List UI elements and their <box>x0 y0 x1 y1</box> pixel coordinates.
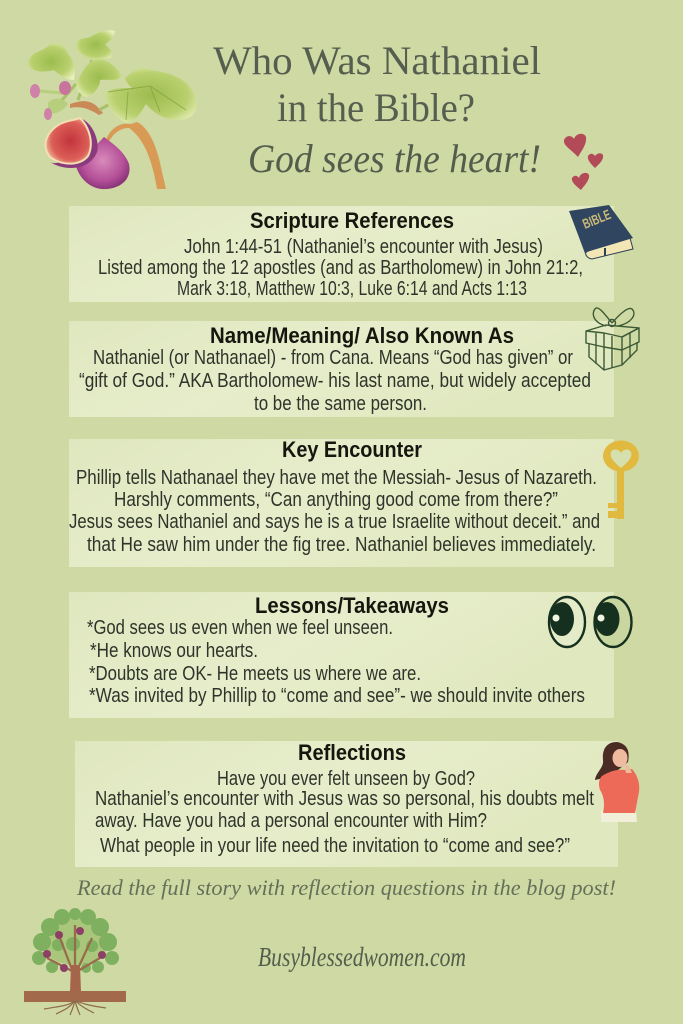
text: reflections body: What people in your life need the invitation to “come and see?” <box>100 835 570 857</box>
icon: fig branch <box>27 30 197 189</box>
text: name meaning body <box>79 347 591 415</box>
panel: lessons and takeaways <box>69 592 614 718</box>
text: key encounter body <box>69 467 600 556</box>
text: reflections body <box>95 768 594 857</box>
text: scripture list: Mark 3:18, Matthew 10:3, Luke 6:14 and Acts 1:13 <box>177 278 527 300</box>
heading: reflections: Reflections <box>298 740 406 765</box>
text: lessons list: *God sees us even when we feel unseen. <box>87 617 393 639</box>
closing call to action: Read the full story with reflection questions in the blog post! <box>76 875 616 900</box>
website: Busyblessedwomen.com <box>258 942 466 972</box>
panel: name meaning <box>69 321 614 417</box>
icon: eyes <box>549 597 632 647</box>
title <box>213 38 541 130</box>
text: name meaning body: “gift of God.” AKA Bartholomew- his last name, but widely accepted <box>79 370 591 392</box>
heading: key encounter: Key Encounter <box>282 437 422 462</box>
text: lessons list <box>87 617 585 707</box>
text: reflections body: Have you ever felt unseen by God? <box>217 768 475 790</box>
icon: hearts <box>564 134 603 190</box>
text: key encounter body: that He saw him under the fig tree. Nathaniel believes immediately. <box>87 534 596 556</box>
icon: fig tree with roots <box>24 908 126 1015</box>
icon: thinking woman <box>595 742 639 822</box>
text: key encounter body: Harshly comments, “Can anything good come from there?” <box>114 489 558 511</box>
heading: scripture references: Scripture References <box>250 208 454 233</box>
text: name meaning body: to be the same person. <box>254 393 427 415</box>
subtitle: God sees the heart! <box>248 136 541 181</box>
icon: gift box <box>586 308 639 370</box>
heading: name meaning: Name/Meaning/ Also Known As <box>210 323 514 348</box>
text: lessons list: *Doubts are OK- He meets us where we are. <box>89 663 421 685</box>
text: scripture list <box>98 236 583 300</box>
icon: bible: BIBLE <box>580 206 613 232</box>
icon: bible <box>569 205 633 259</box>
panel: key encounter <box>69 437 614 567</box>
text: key encounter body: Phillip tells Nathanael they have met the Messiah- Jesus of Nazareth. <box>76 467 597 489</box>
text: scripture list: Listed among the 12 apostles (and as Bartholomew) in John 21:2, <box>98 257 583 279</box>
text: lessons list: *Was invited by Phillip to “come and see”- we should invite others <box>89 685 585 707</box>
panel: scripture references <box>69 206 614 302</box>
text: scripture list: John 1:44-51 (Nathaniel’s encounter with Jesus) <box>184 236 543 258</box>
text: lessons list: *He knows our hearts. <box>90 640 258 662</box>
title: Who Was Nathaniel <box>213 38 541 83</box>
text: name meaning body: Nathaniel (or Nathanael) - from Cana. Means “God has given” or <box>93 347 573 369</box>
icon: gold key <box>603 440 639 519</box>
panel: reflections <box>75 740 618 867</box>
text: reflections body: Nathaniel’s encounter with Jesus was so personal, his doubts melt <box>95 788 594 810</box>
heading: lessons: Lessons/Takeaways <box>255 593 449 618</box>
title: in the Bible? <box>277 85 475 130</box>
text: reflections body: away. Have you had a personal encounter with Him? <box>95 810 487 832</box>
